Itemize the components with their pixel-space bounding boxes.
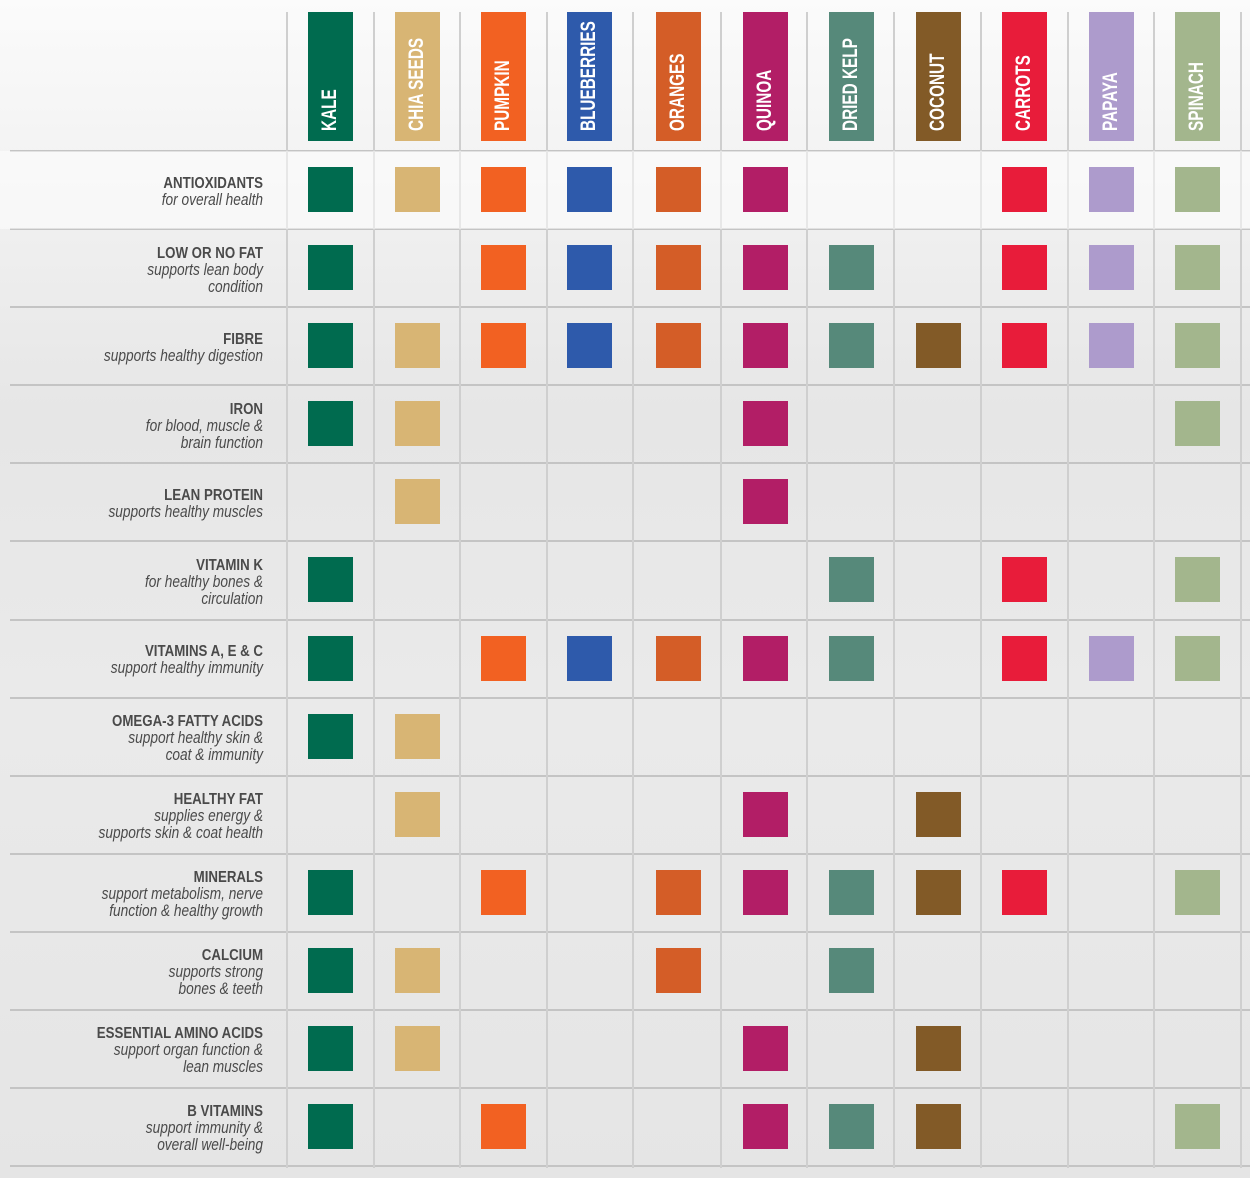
label: fibre: FIBRE (223, 331, 263, 348)
label: minerals: support metabolism, nerve (102, 885, 263, 903)
label: omega-3: support healthy skin & (128, 729, 263, 747)
header: spinach: SPINACH (1185, 62, 1208, 131)
label: vitamins a e c: support healthy immunity (111, 659, 263, 677)
header: spinach (1175, 12, 1220, 141)
header: oranges: ORANGES (666, 53, 689, 131)
label: healthy fat: supplies energy & (154, 807, 263, 825)
row: minerals (102, 869, 1220, 920)
header: kale (308, 12, 353, 141)
row: lean protein (108, 479, 788, 524)
header: pumpkin: PUMPKIN (491, 60, 514, 131)
row: calcium (168, 947, 874, 998)
label: omega-3: coat & immunity (166, 746, 263, 764)
label: vitamins a e c (110, 643, 264, 677)
label: low fat: supports lean body (147, 261, 263, 279)
label: vitamin k: VITAMIN K (196, 557, 263, 574)
label: amino acids (97, 1025, 263, 1076)
header: coconut (916, 12, 961, 141)
label: calcium: CALCIUM (202, 947, 263, 964)
header: papaya: PAPAYA (1099, 72, 1122, 131)
label: low fat: condition (208, 278, 263, 296)
label: omega-3: OMEGA-3 FATTY ACIDS (112, 713, 263, 730)
row: low or no fat (147, 245, 1220, 296)
header: carrots (1002, 12, 1047, 141)
label: antioxidants: ANTIOXIDANTS (163, 175, 263, 192)
label: calcium: supports strong (169, 963, 263, 981)
label: vitamins a e c: VITAMINS A, E & C (145, 643, 263, 660)
label: fibre (104, 331, 263, 365)
row: fibre (104, 323, 1220, 368)
column headers (308, 12, 1220, 141)
label: healthy fat: supports skin & coat health (99, 824, 263, 842)
label: iron: brain function (181, 434, 263, 452)
header: oranges (656, 12, 701, 141)
row: antioxidants (0, 151, 1250, 229)
header: dried kelp (829, 12, 874, 141)
label: low fat (147, 245, 264, 296)
header: kale: KALE (318, 89, 341, 131)
label: lean protein: LEAN PROTEIN (164, 487, 263, 504)
label: minerals: function & healthy growth (109, 902, 263, 920)
label: minerals (102, 869, 263, 920)
label: low fat: LOW OR NO FAT (157, 245, 263, 262)
header: pumpkin (481, 12, 526, 141)
header: blueberries: BLUEBERRIES (577, 21, 600, 131)
label: omega-3 (112, 713, 264, 764)
label: b vitamins: B VITAMINS (187, 1103, 263, 1120)
label: vitamin k: for healthy bones & (145, 573, 263, 591)
label: calcium: bones & teeth (178, 980, 263, 998)
label: healthy fat (98, 791, 263, 842)
row: b vitamins (146, 1103, 1220, 1154)
label: calcium (168, 947, 263, 998)
label: iron: for blood, muscle & (146, 417, 263, 435)
label: iron: IRON (230, 401, 263, 418)
row: vitamin k (145, 557, 1220, 608)
row: essential amino acids (97, 1025, 961, 1076)
header: dried kelp: DRIED KELP (839, 38, 862, 131)
label: lean protein: supports healthy muscles (108, 503, 263, 521)
label: lean protein (108, 487, 263, 521)
label: antioxidants: for overall health (162, 191, 263, 209)
row: iron (146, 401, 1220, 452)
label: antioxidants (162, 175, 263, 209)
header: quinoa: QUINOA (753, 70, 776, 131)
label: b vitamins (146, 1103, 263, 1154)
label: vitamin k: circulation (201, 590, 263, 608)
label: minerals: MINERALS (194, 869, 263, 886)
header: papaya (1089, 12, 1134, 141)
header: quinoa (743, 12, 788, 141)
header: coconut: COCONUT (926, 53, 949, 131)
label: b vitamins: support immunity & (146, 1119, 263, 1137)
row: omega-3 (112, 713, 440, 764)
label: b vitamins: overall well-being (157, 1136, 263, 1154)
label: iron (146, 401, 263, 452)
header: chia seeds (395, 12, 440, 141)
label: vitamin k (145, 557, 263, 608)
row: vitamins a e c (110, 636, 1220, 681)
label: amino acids: ESSENTIAL AMINO ACIDS (97, 1025, 263, 1042)
header: chia seeds: CHIA SEEDS (405, 38, 428, 131)
header: blueberries (567, 12, 612, 141)
label: fibre: supports healthy digestion (104, 347, 263, 365)
header: carrots: CARROTS (1012, 55, 1035, 131)
row: healthy fat (98, 791, 961, 842)
label: healthy fat: HEALTHY FAT (174, 791, 263, 808)
label: amino acids: support organ function & (114, 1041, 263, 1059)
label: amino acids: lean muscles (183, 1058, 263, 1076)
